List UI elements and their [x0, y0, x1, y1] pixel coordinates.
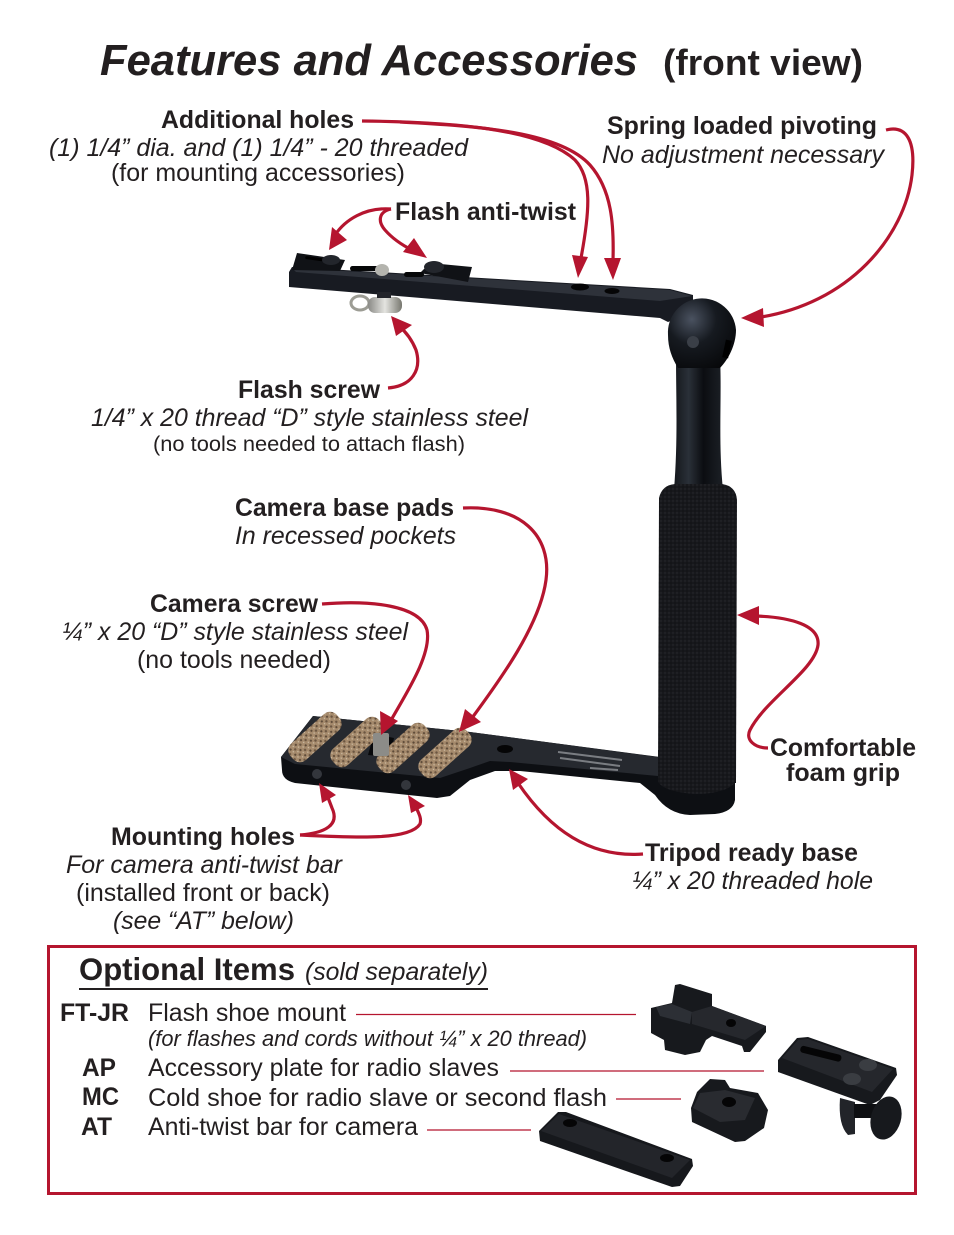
optional items heading: Optional Items [79, 951, 295, 987]
arrow: camera base pads [459, 508, 547, 732]
item: FT-JR: FT-JR [60, 999, 129, 1027]
label: mounting holes [66, 823, 344, 935]
label: camera base pads: Camera base pads [235, 494, 454, 522]
camera mount hole [368, 734, 394, 757]
label: mounting holes: (installed front or back) [76, 879, 330, 907]
label: camera screw: Camera screw [150, 590, 319, 618]
label: camera screw: ¼” x 20 “D” style stainless steel [62, 618, 409, 646]
photo: flash shoe mount [651, 984, 766, 1055]
foam grip [658, 484, 737, 783]
arrow: camera screw [322, 603, 428, 735]
arrows: mounting holes [300, 783, 425, 837]
label: comfortable foam grip [770, 734, 916, 787]
photo: cold shoe [691, 1079, 768, 1142]
label: additional holes: (1) 1/4” dia. and (1) 1/4” - 20 threaded [49, 134, 469, 162]
label: flash anti-twist: Flash anti-twist [395, 198, 577, 226]
optional items heading: (sold separately) [305, 958, 488, 986]
title: (front view) [663, 42, 863, 83]
label: tripod ready base: Tripod ready base [645, 839, 858, 867]
label: camera base pads: In recessed pockets [235, 522, 456, 550]
optional items heading [79, 951, 488, 990]
arrow: spring loaded pivoting [741, 129, 913, 327]
label: comfortable foam grip: Comfortable [770, 734, 916, 762]
label: spring loaded pivoting: Spring loaded pivoting [607, 112, 877, 140]
item: MC: MC [82, 1083, 119, 1111]
base plate [281, 716, 735, 815]
arrows: additional holes [362, 121, 621, 280]
item: FT-JR: (for flashes and cords without ¼” x 20 thread) [148, 1026, 587, 1051]
flash anti-twist sliders [292, 253, 472, 282]
label: additional holes [49, 106, 469, 187]
photo: anti-twist bar [539, 1112, 693, 1187]
product photo: flash bracket [281, 253, 737, 815]
label: spring loaded pivoting: No adjustment necessary [602, 141, 885, 169]
item: AP: Accessory plate for radio slaves [148, 1054, 499, 1082]
item: AP: AP [82, 1054, 116, 1082]
upper arm [289, 267, 693, 322]
label: flash screw [91, 376, 529, 456]
label: tripod ready base [632, 839, 873, 895]
label: camera base pads [235, 494, 456, 550]
item: MC: Cold shoe for radio slave or second flash [148, 1084, 607, 1112]
label: spring loaded pivoting [602, 112, 885, 169]
camera screw [373, 733, 389, 756]
arrow: tripod base [509, 769, 643, 854]
label: additional holes: Additional holes [161, 106, 354, 134]
title: Features and Accessories [100, 37, 638, 85]
label: flash screw: Flash screw [238, 376, 381, 404]
pivot ball [668, 298, 736, 368]
label: mounting holes: For camera anti-twist bar [66, 851, 344, 879]
label: mounting holes: (see “AT” below) [113, 907, 294, 935]
item: AT [81, 1113, 531, 1141]
flash screw [351, 292, 402, 313]
label: camera screw [62, 590, 409, 674]
label: camera screw: (no tools needed) [137, 646, 331, 674]
arrow: foam grip [737, 606, 818, 748]
base engraving [558, 752, 622, 770]
photo: accessory plate [778, 1037, 906, 1143]
label: additional holes: (for mounting accessories) [111, 159, 405, 187]
label: tripod ready base: ¼” x 20 threaded hole [632, 867, 873, 895]
item: AT: AT [81, 1113, 112, 1141]
label: flash screw: (no tools needed to attach flash) [153, 432, 465, 456]
arrows: flash anti-twist [329, 209, 427, 258]
label: comfortable foam grip: foam grip [786, 759, 900, 787]
cork pads [285, 708, 475, 782]
handle pole [674, 355, 723, 490]
item: AP [82, 1054, 764, 1082]
label: mounting holes: Mounting holes [111, 823, 295, 851]
label: flash screw: 1/4” x 20 thread “D” style stainless steel [91, 404, 529, 432]
item: FT-JR [60, 999, 636, 1051]
item: FT-JR: Flash shoe mount [148, 999, 346, 1027]
panel: optional items [48, 946, 916, 1194]
arrow: flash screw [388, 316, 418, 388]
item: AT: Anti-twist bar for camera [148, 1113, 418, 1141]
